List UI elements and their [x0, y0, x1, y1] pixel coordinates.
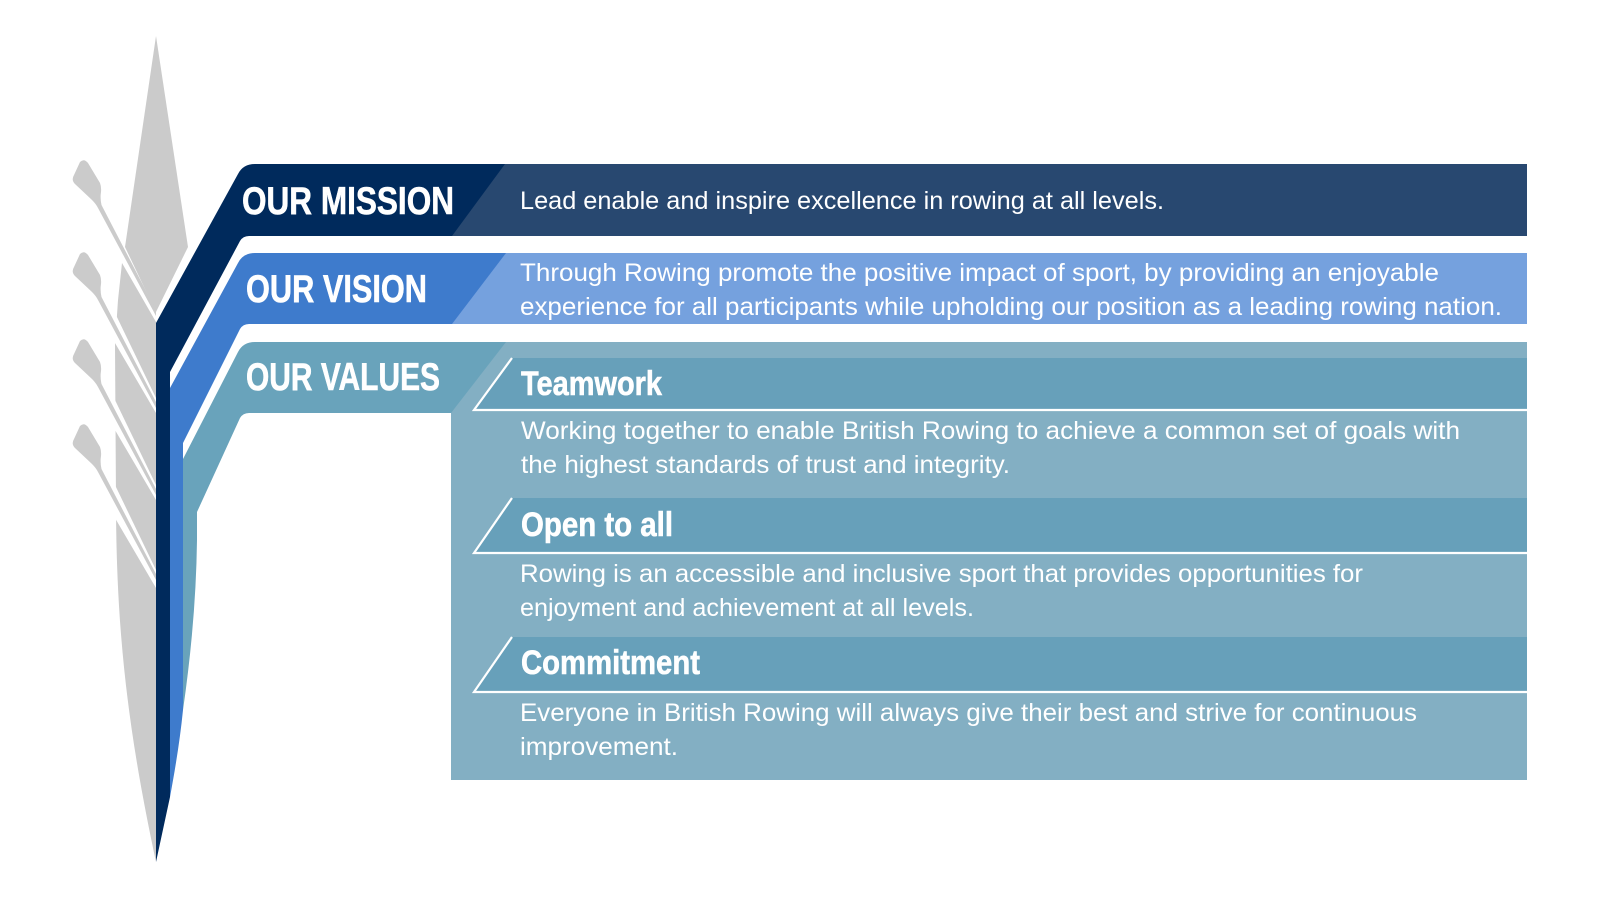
- value: open to all: enjoyment and achievement at all levels.: [520, 594, 974, 622]
- value: teamwork: [474, 358, 1527, 479]
- value: teamwork: the highest standards of trust and integrity.: [521, 451, 1010, 479]
- panel: mission text background: [452, 164, 1527, 236]
- value: commitment: [474, 637, 1527, 761]
- text: vision statement: [520, 259, 1502, 321]
- panel: our mission header band: [156, 164, 510, 862]
- value: open to all: Rowing is an accessible and inclusive sport that provides opportunities for: [520, 560, 1363, 588]
- text: vision statement: experience for all participants while upholding our position as a leading rowing nation.: [520, 293, 1502, 321]
- value: commitment: Commitment: [521, 644, 700, 682]
- heading: our values: OUR VALUES: [246, 356, 440, 399]
- value: teamwork: Teamwork: [521, 365, 662, 403]
- value: commitment: improvement.: [520, 733, 678, 761]
- heading: our vision: OUR VISION: [246, 268, 427, 311]
- icon: rowing blade and oars in grey: [73, 36, 188, 862]
- value: teamwork: Working together to enable British Rowing to achieve a common set of goals with: [521, 417, 1460, 445]
- panel: values text background: [451, 342, 1527, 780]
- text: vision statement: Through Rowing promote the positive impact of sport, by providing an enjoyable: [520, 259, 1439, 287]
- panel: our values header band: [183, 342, 510, 710]
- heading: our mission: OUR MISSION: [242, 180, 454, 223]
- panel: vision text background: [452, 253, 1527, 324]
- text: mission statement: Lead enable and inspire excellence in rowing at all levels.: [520, 187, 1164, 215]
- panel: our vision header band: [170, 253, 510, 797]
- value: open to all: [474, 498, 1527, 622]
- value: open to all: Open to all: [521, 506, 673, 544]
- value: commitment: Everyone in British Rowing will always give their best and strive for continuous: [520, 699, 1417, 727]
